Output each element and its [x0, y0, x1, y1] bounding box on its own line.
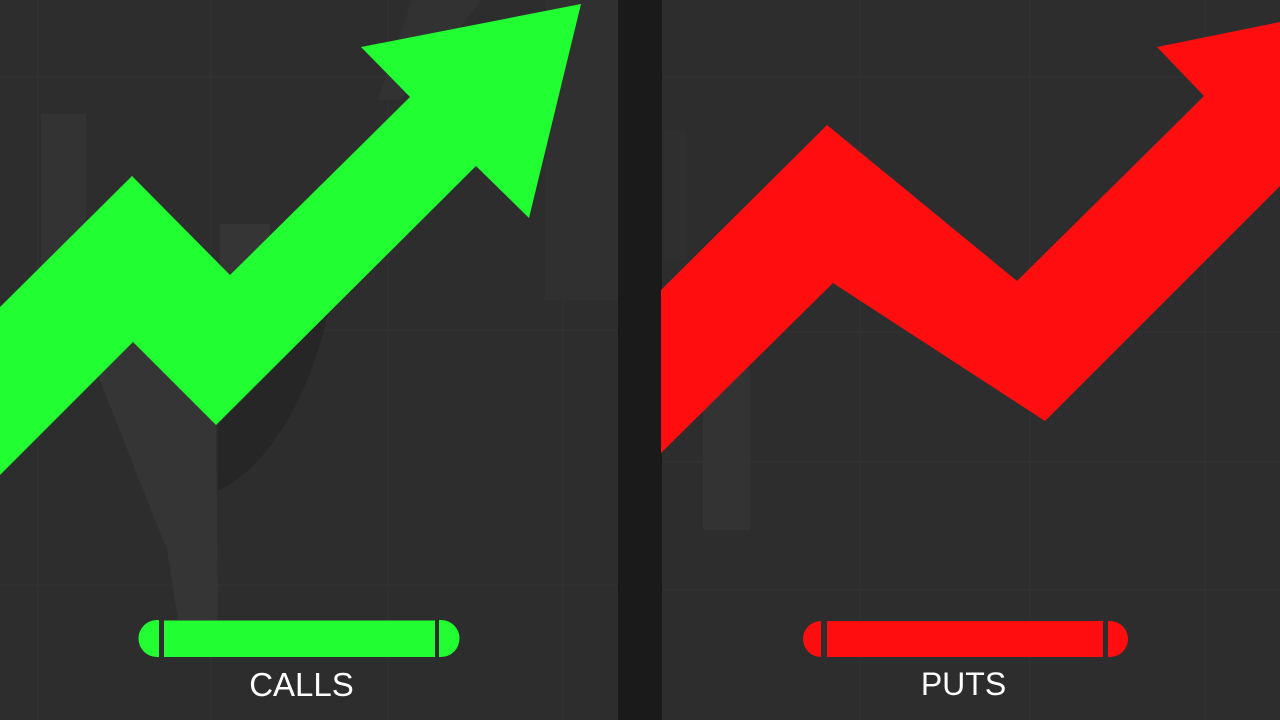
arrow: green rising zigzag [0, 4, 581, 475]
panel: puts background candlesticks [664, 130, 750, 530]
legend: puts [803, 621, 1128, 702]
calls candle bar [138, 620, 460, 657]
arrow: red zigzag [661, 22, 1280, 453]
legend: calls [138, 620, 460, 703]
divider between panels [618, 0, 662, 720]
puts candle bar [803, 621, 1128, 657]
puts label: PUTS [921, 666, 1006, 702]
panel: calls background candlesticks [41, 0, 618, 620]
calls label: CALLS [249, 666, 354, 703]
